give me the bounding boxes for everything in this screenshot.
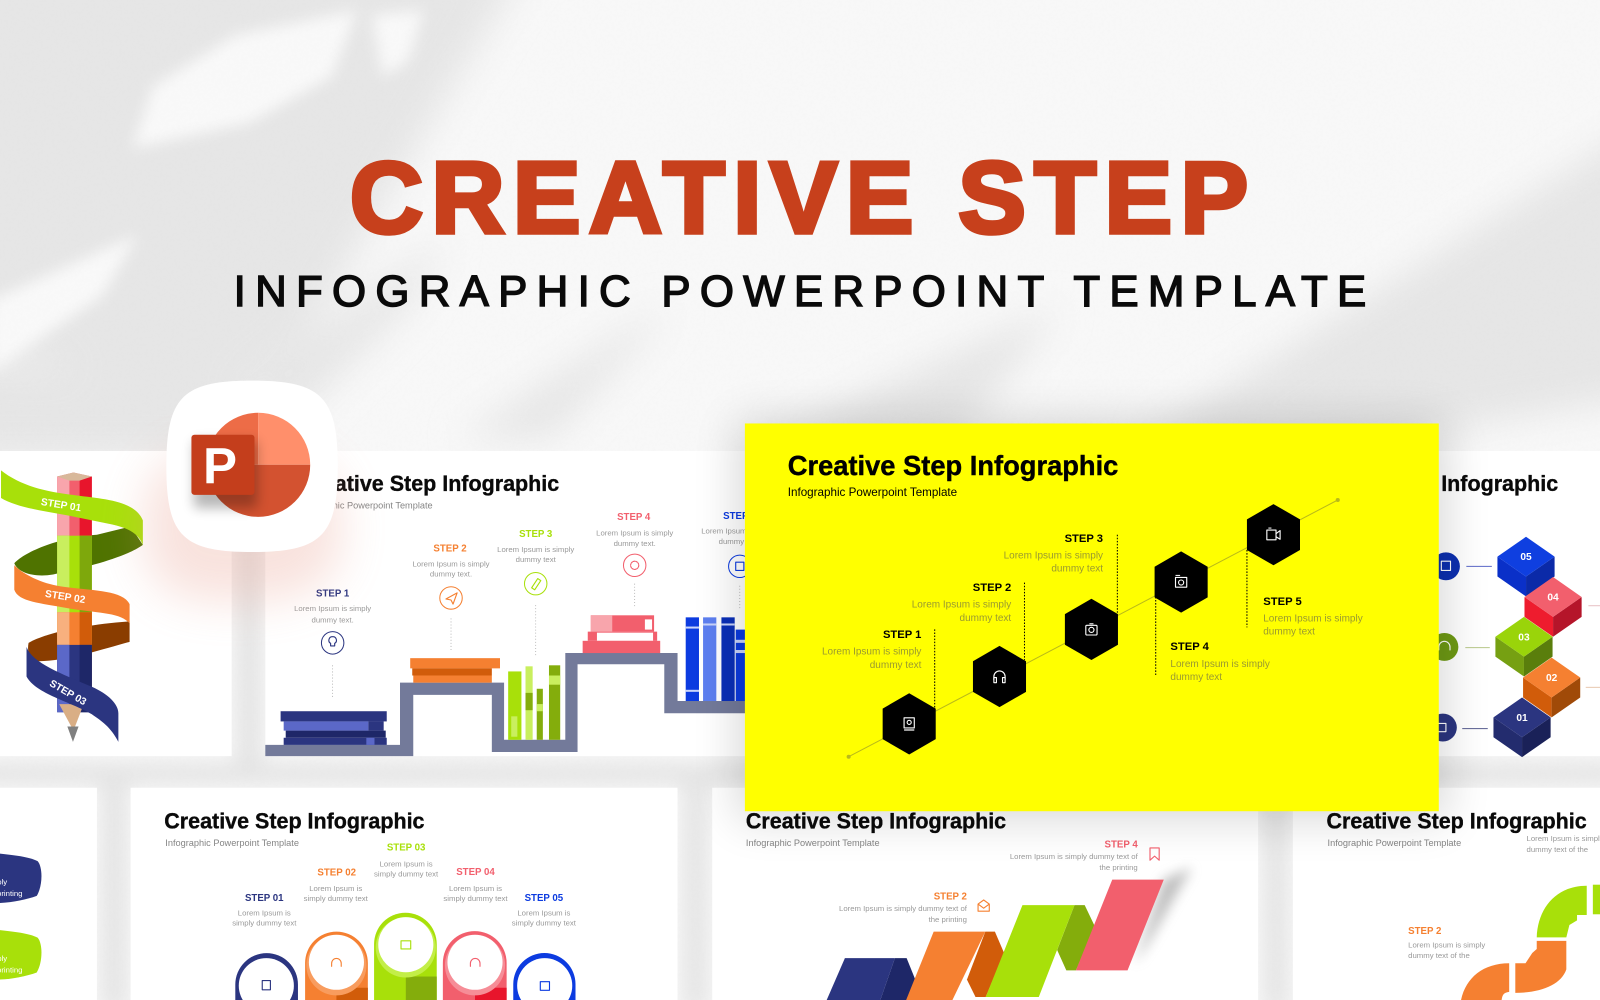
pill 4 [443,931,507,1000]
slide subheading: Infographic Powerpoint Template [165,838,299,848]
slide subheading: Infographic Powerpoint Template [746,838,880,848]
step 2 label: the printing [929,915,967,924]
step 1: Lorem Ipsum is simply [294,604,371,613]
step 02: Lorem Ipsum is [309,884,362,893]
step 2: Lorem Ipsum is simply [412,559,490,568]
logo shadow [194,441,257,508]
panel: books step slide [265,451,778,756]
step 04 [443,867,508,903]
green books [508,665,560,740]
step 04: Lorem Ipsum is [449,884,502,893]
step 4: dummy text [1170,672,1222,683]
step 5: STEP 5 [1263,596,1302,608]
step 2: Lorem Ipsum is simply [912,600,1011,611]
step 5: Lorem Ipsum is simply [701,527,778,536]
step 2 label: Lorem Ipsum is simply [1408,940,1485,949]
step 3: dummy text [1051,563,1103,574]
logo letter: P [203,438,237,495]
step 3: STEP 3 [519,529,553,540]
step 04: STEP 04 [456,867,495,878]
step 4 label: the printing [1099,863,1138,872]
subtitle: INFOGRAPHIC POWERPOINT TEMPLATE [234,267,1366,316]
step 02: STEP 02 [317,868,356,879]
step 2 [912,582,1026,707]
pill 5 [513,953,576,1000]
blue books [686,617,748,701]
main title: CREATIVE STEP [350,143,1248,255]
orange books [410,658,500,683]
step 1: dummy text [870,660,922,671]
ribbon: navy [824,958,915,1000]
step 2: STEP 2 [973,582,1011,594]
navy blob [0,853,41,903]
step 3 [1004,533,1118,660]
step 4 label: Lorem Ipsum is simply dummy text of [1010,852,1139,861]
step 4: STEP 4 [1170,641,1210,653]
step 2 label: STEP 2 [934,891,967,902]
step 5 [701,511,778,610]
slide subheading: Infographic Powerpoint Template [299,501,433,511]
step 2 label [1408,926,1485,960]
icon: PowerPoint logo tile [166,381,338,552]
step 03: STEP 03 [387,843,426,854]
navy books [281,711,387,745]
step 5: dummy text. [719,537,761,546]
step 4: STEP 4 [617,512,651,523]
step 1 [822,629,936,754]
step 03 [374,843,439,879]
yellow slide drop shadow [737,420,1447,820]
step 5: dummy text [1263,627,1315,638]
panel: blobs slide fragment [0,788,97,1000]
step 3: STEP 3 [1065,533,1103,545]
ribbon: green [986,905,1095,997]
icon circles and connectors [1429,552,1600,742]
icon glow [143,449,342,602]
step 2: STEP 2 [433,544,467,555]
step 03: simply dummy text [374,870,439,879]
slide heading: Creative Step Infographic [788,450,1118,481]
panel: pencil slide [0,451,232,756]
slide heading: Creative Step Infographic [299,471,559,496]
cube 01: 01 [1516,713,1528,724]
ribbon step 03 [27,647,118,742]
step 1: STEP 1 [883,629,921,641]
ribbon step 02: STEP 02 [44,589,86,606]
panel: isometric cubes slide [1298,451,1600,757]
cube 05 [1497,537,1555,596]
slide heading: Creative Step Infographic [746,809,1006,834]
ribbon: red [1076,880,1164,970]
step 1: dummy text. [312,615,354,624]
ribbon step 03: STEP 03 [47,678,88,708]
ribbon step 01: STEP 01 [40,497,82,514]
step 2 label: STEP 2 [1408,926,1441,937]
pencil illustration [57,472,92,742]
ribbon step 01 [1,470,143,545]
step 05: Lorem Ipsum is [517,908,570,917]
step 2: dummy text. [430,570,472,579]
step 02 [304,868,369,903]
panel: folded ribbon slide [712,788,1258,1000]
pill 3 [374,913,437,1000]
step 1: Lorem Ipsum is simply [822,647,921,658]
ribbon back loops [14,527,143,661]
pipe shapes [1460,885,1600,1000]
step 02: simply dummy text [304,894,369,903]
cube 04 [1524,577,1582,637]
step 5: Lorem Ipsum is simply [1263,613,1363,624]
step 3: dummy text [516,555,557,564]
step 4: dummy text. [614,539,656,548]
step 3: Lorem Ipsum is simply [1004,551,1103,562]
step 05: STEP 05 [525,893,564,904]
cube 02: 02 [1546,673,1558,684]
step 5: STEP 5 [723,511,757,522]
step 4: Lorem Ipsum is simply [596,529,673,538]
step 04: simply dummy text [443,894,508,903]
step 4 label: STEP 4 [1105,839,1138,850]
cube 05: 05 [1520,552,1532,563]
cube 04: 04 [1547,593,1559,604]
slide heading: Creative Step Infographic [1298,471,1558,496]
step 2 [412,544,490,650]
step 01: Lorem Ipsum is [238,908,291,917]
step 01: STEP 01 [245,893,284,904]
logo disc [206,413,310,517]
step 03: Lorem Ipsum is [380,859,433,868]
cube 02 [1523,658,1580,717]
step 2: dummy text [960,613,1011,624]
top right note [1527,834,1600,854]
step 4: Lorem Ipsum is simply [1170,659,1270,670]
step 1 [294,588,371,698]
cube 01 [1493,697,1551,757]
green blob [0,930,41,980]
step 01: simply dummy text [232,919,297,928]
step 3 [497,529,574,657]
step 4 [596,512,673,608]
step 5 [1247,504,1363,638]
step 4 label [1010,839,1159,872]
slide subheading: Infographic Powerpoint Template [1328,838,1461,848]
step 05: simply dummy text [512,919,577,928]
step 01 [232,893,297,928]
step 2 label [839,891,989,924]
cube 03: 03 [1518,632,1530,643]
cube 03 [1495,617,1553,677]
ribbon shadow [1135,867,1192,964]
stair shelf [265,653,755,756]
top right note: dummy text of the [1527,845,1588,854]
pill 1 [235,953,298,1000]
step 1: STEP 1 [316,588,350,599]
step 2 label: Lorem Ipsum is simply dummy text of [839,904,968,913]
step 3: Lorem Ipsum is simply [497,545,574,554]
panel: pill steps slide [131,788,678,1000]
panel: yellow hexagon step slide [745,423,1439,811]
step 05 [512,893,577,928]
slide heading: Creative Step Infographic [164,809,424,834]
logo plate [191,435,254,495]
slide heading: Creative Step Infographic [1327,809,1587,834]
step 2 label: dummy text of the [1408,951,1470,960]
diagonal line [847,498,1340,759]
red books [583,615,660,653]
pill 2 [305,932,368,1000]
step 4 [1155,551,1270,683]
slide subheading: Infographic Powerpoint Template [788,486,957,499]
ribbon: orange [904,932,1004,1000]
ribbon step 02 [14,565,130,623]
panel: pipe slide [1293,788,1600,1000]
